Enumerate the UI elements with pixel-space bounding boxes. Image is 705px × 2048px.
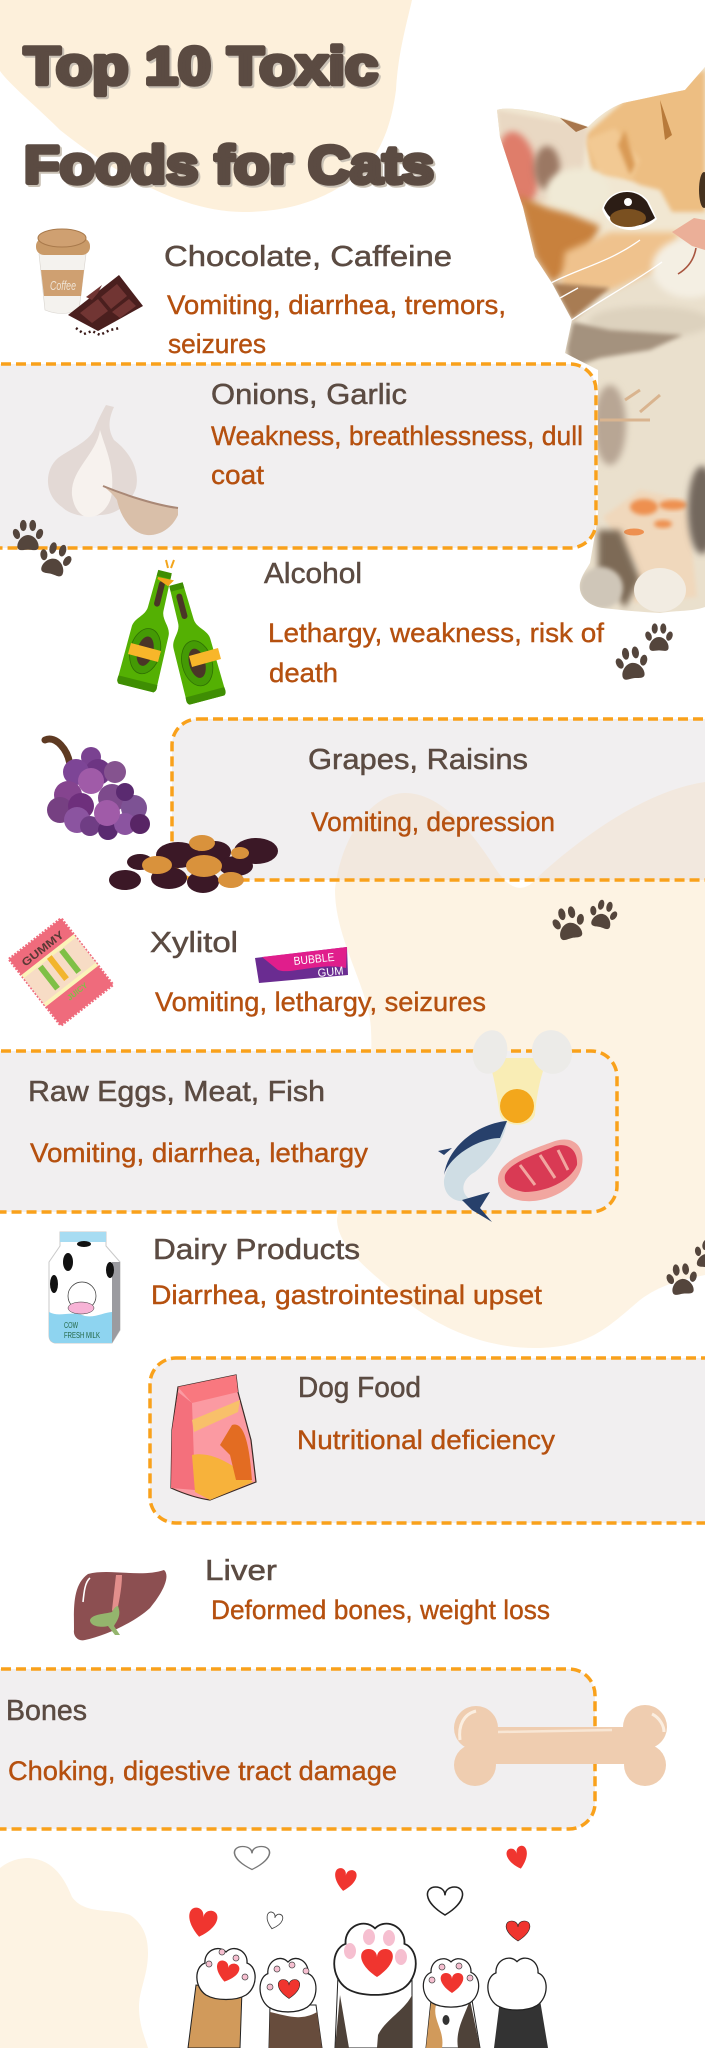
icon: raisins [109,835,278,893]
icon: beer bottles [116,560,227,705]
icon: gummy candy pack [9,919,113,1025]
item: raw eggs, meat, fish: Vomiting, diarrhea, lethargy [30,1138,369,1168]
item: onions, garlic: coat [211,460,265,490]
icon: raw steak [498,1140,583,1201]
item: bones: Bones [6,1695,87,1727]
icon: chocolate bar [68,275,143,335]
illustration: cat paw 5 [488,1958,548,2048]
decoration: hearts [185,1845,531,1941]
icon: paw print 2 [34,539,76,579]
icon: paw print 8 [691,1238,705,1270]
item: liver: Deformed bones, weight loss [211,1595,550,1625]
icon: paw print 7 [664,1262,700,1296]
background blob: middle [335,782,705,1348]
icon: paw print 1 [11,520,45,550]
icon: coffee cup: Coffee [50,278,76,293]
item: alcohol: Lethargy, weakness, risk of [268,618,605,648]
item: onions, garlic: Onions, Garlic [211,379,407,411]
panel: onions, garlic [0,364,596,548]
illustration: cat paw 2 [260,1958,322,2048]
item: chocolate, caffeine [164,241,506,359]
item: chocolate, caffeine: Chocolate, Caffeine [164,241,452,273]
item: dairy products: Diarrhea, gastrointestinal upset [151,1280,543,1310]
item: bones: Choking, digestive tract damage [8,1756,397,1786]
feature: cat eye [602,191,657,230]
item: bones [6,1695,397,1786]
item: grapes, raisins: Grapes, Raisins [308,744,528,776]
item: onions, garlic [211,379,583,490]
item: alcohol: death [269,658,338,688]
panel: raw eggs, meat, fish [0,1051,617,1212]
item: xylitol [150,927,486,1017]
item: xylitol: Xylitol [150,927,238,959]
item: dog food: Dog Food [298,1372,421,1404]
item: xylitol: Vomiting, lethargy, seizures [155,987,486,1017]
icon: gummy candy pack: JUICY [65,980,90,1002]
icon: paw print 5 [644,623,674,651]
item: raw eggs, meat, fish [28,1076,369,1168]
icon: milk carton [49,1232,120,1343]
item: dog food [297,1372,556,1455]
item: chocolate, caffeine: seizures [168,329,266,359]
icon: paw print 6 [613,645,651,681]
icon: cracked egg [468,1026,577,1125]
icon: bubble gum: GUM [317,965,344,980]
icon: paw print 4 [585,897,621,931]
item: liver [205,1555,550,1625]
illustration: cat paw 3 [334,1924,416,2048]
feature: cat nose and mouth [672,172,705,274]
item: dairy products [151,1234,543,1310]
icon: milk carton: FRESH MILK [64,1331,100,1340]
panel: bones [0,1669,595,1829]
item: liver: Liver [205,1555,277,1587]
illustration: cat paw 1 [188,1949,255,2048]
background blob: top [0,0,412,212]
icon: grapes [45,739,150,840]
item: onions, garlic: Weakness, breathlessness, dull [211,421,583,451]
icon: paw print 3 [549,904,589,942]
panel: grapes, raisins [170,717,705,882]
title [24,37,434,195]
icon: bubble gum: BUBBLE [293,952,335,968]
icon: bubble gum [255,947,348,983]
illustration: watercolor cat [490,60,705,620]
title: Top 10 Toxic [24,37,378,96]
panel: dog food [150,1358,705,1523]
item: alcohol: Alcohol [264,558,362,590]
item: raw eggs, meat, fish: Raw Eggs, Meat, Fish [28,1076,325,1108]
icon: garlic [48,405,178,535]
illustration: cat paw 4 [423,1959,480,2048]
item: chocolate, caffeine: Vomiting, diarrhea, tremors, [167,290,506,320]
item: dog food: Nutritional deficiency [297,1425,556,1455]
item: grapes, raisins [308,744,555,837]
icon: fish [438,1121,507,1222]
icon: coffee cup [36,229,90,314]
item: grapes, raisins: Vomiting, depression [311,807,555,837]
icon: gummy candy pack: GUMMY [20,929,67,969]
item: dairy products: Dairy Products [153,1234,360,1266]
icon: milk carton: COW [64,1321,78,1330]
icon: liver [74,1570,166,1640]
icon: dog food bag [171,1375,256,1500]
title: Foods for Cats [24,136,434,195]
item: alcohol [264,558,605,688]
background blob: bottom [0,1858,148,2048]
icon: bone [454,1705,667,1786]
